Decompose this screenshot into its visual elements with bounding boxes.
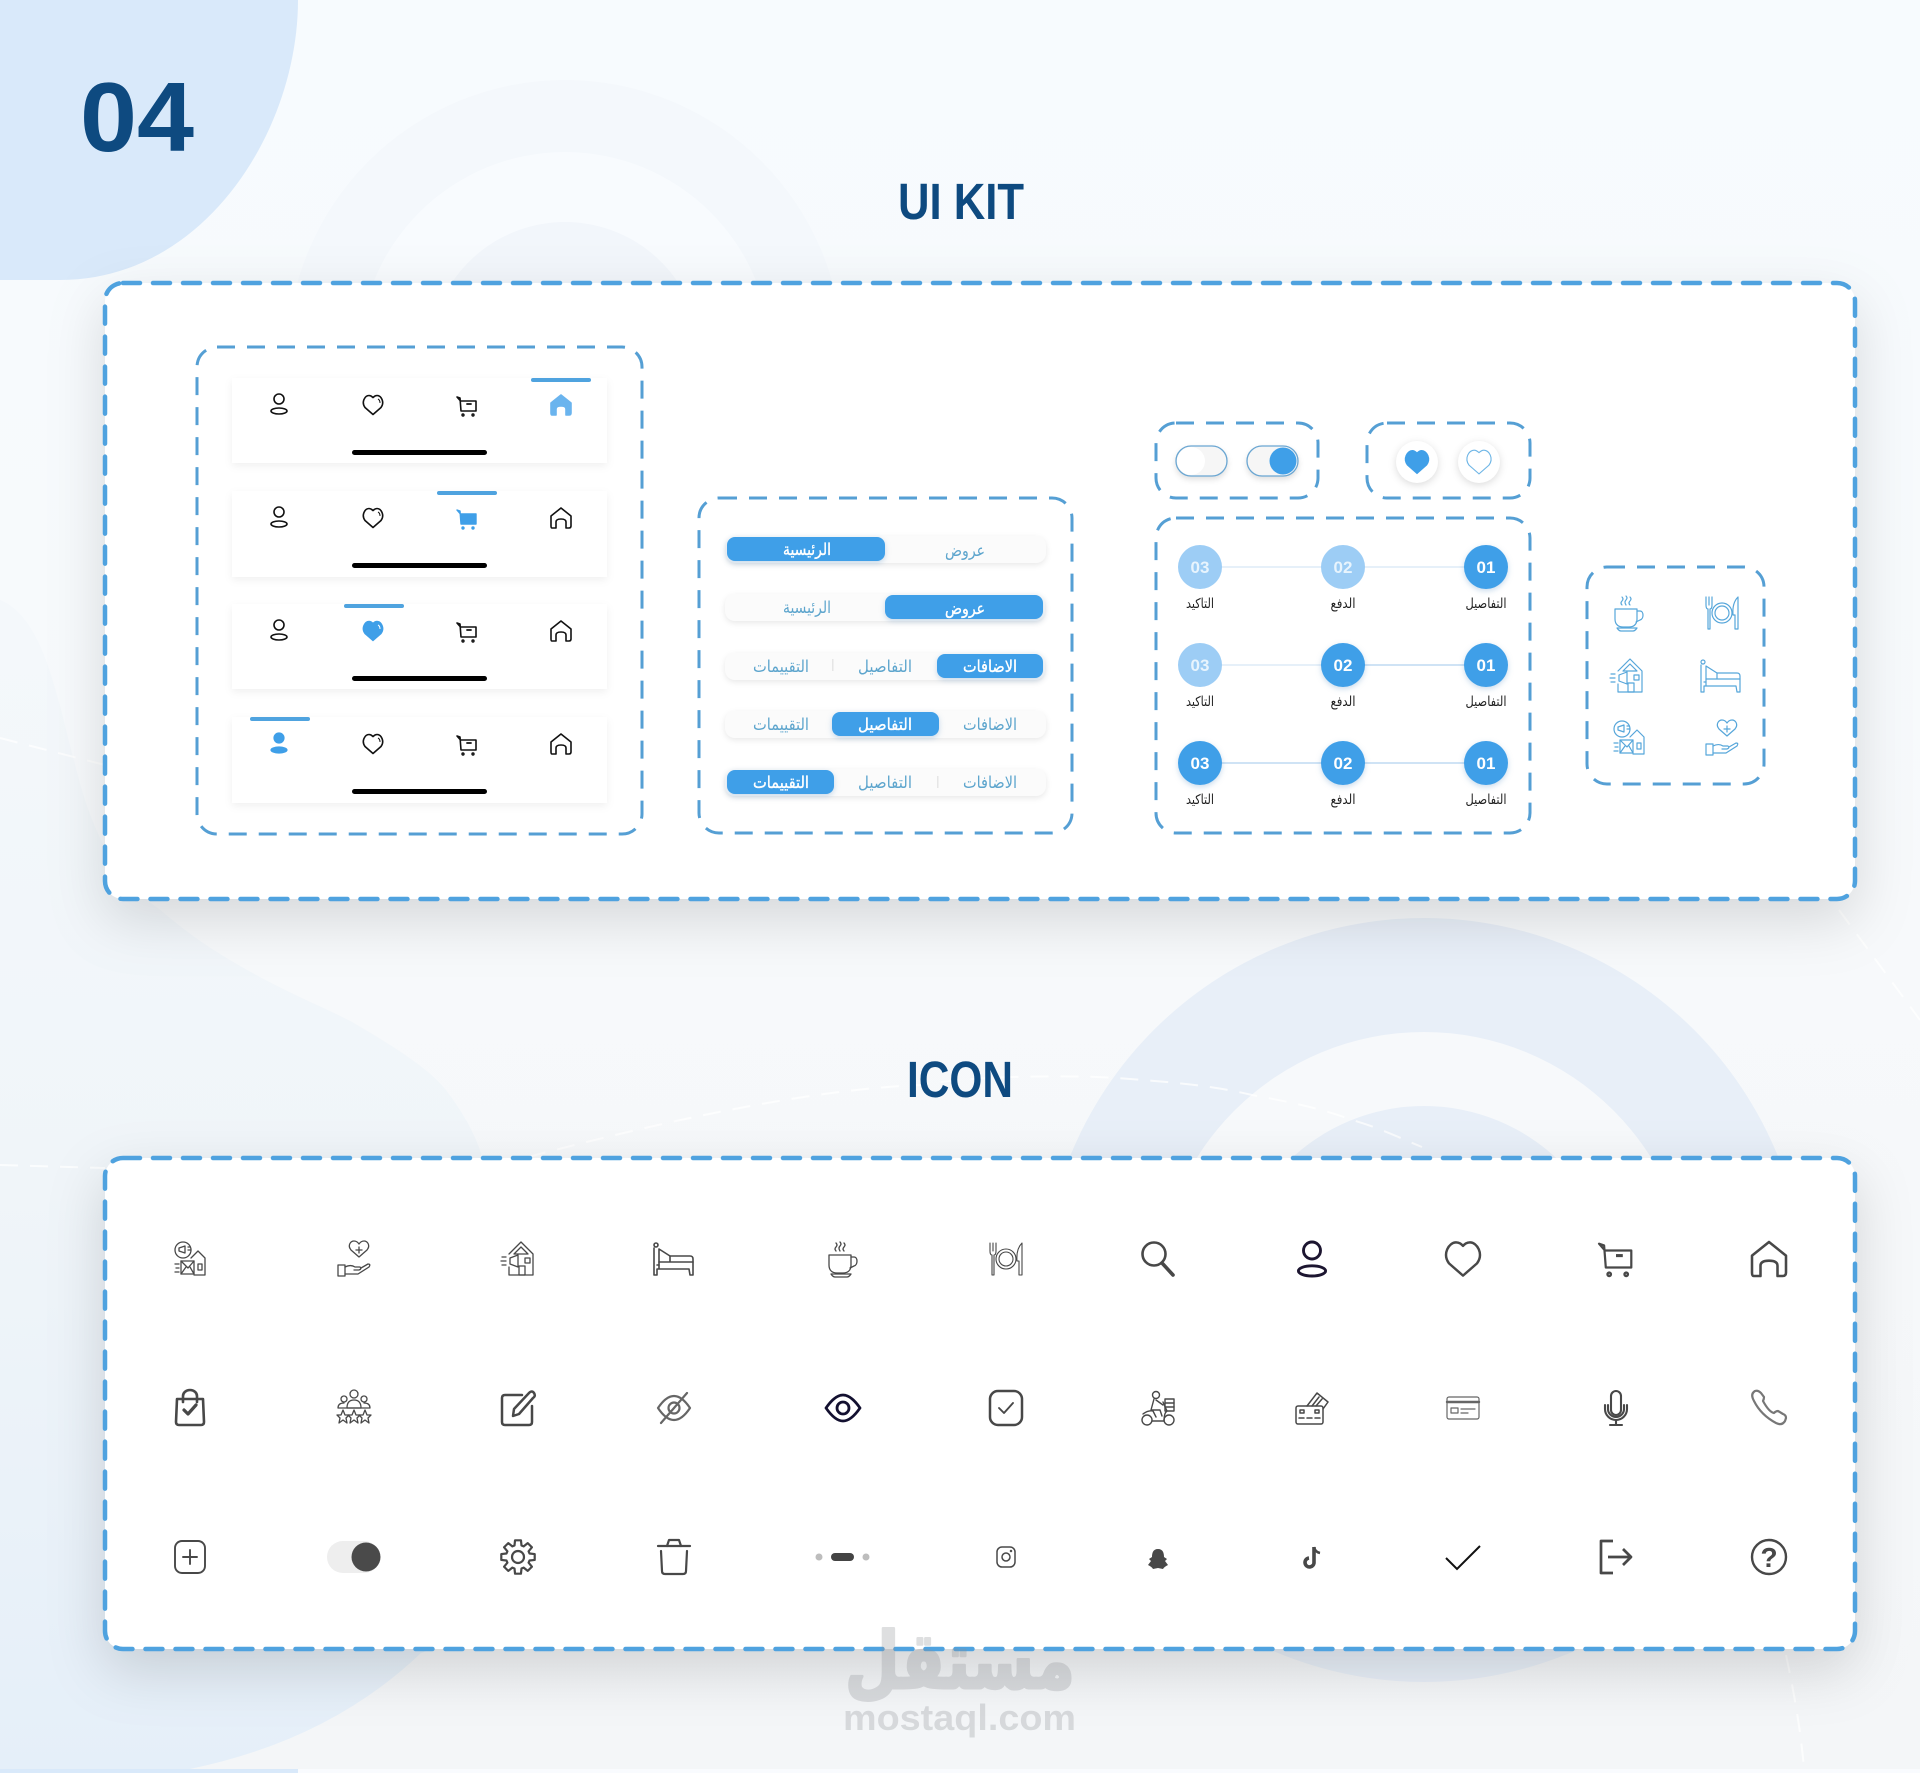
stepper 2: 02 — [1334, 656, 1352, 675]
panel: favourite buttons — [1367, 423, 1530, 498]
icon: plate — [990, 1243, 1022, 1275]
icon: pagination dots — [816, 1553, 870, 1561]
stepper 1 — [1178, 545, 1508, 612]
icon: add square — [175, 1541, 205, 1573]
icon: settings gear — [501, 1540, 535, 1574]
stepper 2: الدفع — [1330, 694, 1356, 710]
tabs row 1: عروض — [945, 541, 985, 561]
section number: 04 — [80, 62, 194, 172]
tabs row 3 — [725, 653, 1045, 680]
icon: coffee — [1615, 596, 1643, 631]
icon grid row 2 — [176, 1390, 1786, 1425]
stepper 2: 03 — [1191, 656, 1209, 675]
background: faint top arcs — [287, 80, 843, 636]
icon: tiktok — [1305, 1547, 1320, 1567]
icon: eye — [826, 1395, 860, 1421]
nav bar 3: heart active — [232, 604, 607, 689]
icon grid row 3 — [175, 1540, 1786, 1574]
icon: instagram — [997, 1547, 1015, 1567]
tabs row 5: التفاصيل — [858, 773, 912, 792]
corner blob — [0, 0, 298, 280]
icon: house megaphone — [501, 1242, 533, 1275]
heading: ICON: ICON — [907, 1051, 1013, 1108]
panel: UI kit — [105, 283, 1855, 899]
stepper 2: التفاصيل — [1466, 694, 1506, 710]
tabs row 4: الاضافات — [963, 715, 1017, 734]
stepper 2: 01 — [1477, 656, 1495, 675]
icon: help — [1752, 1540, 1786, 1574]
tabs row 4 — [725, 711, 1046, 738]
button: filled heart — [1396, 441, 1438, 483]
icon: help: ? — [1760, 1542, 1778, 1573]
stepper 3: 01 — [1477, 754, 1495, 773]
stepper 3: الدفع — [1330, 792, 1356, 808]
icon set frame — [1587, 567, 1764, 784]
icon: phone — [1752, 1391, 1786, 1424]
tabs row 1: الرئيسية — [783, 540, 831, 560]
nav frame — [197, 347, 642, 834]
panel: toggles — [1156, 423, 1318, 498]
icon: house — [1610, 659, 1642, 692]
tabs row 2: عروض — [945, 599, 985, 619]
favourites frame — [1367, 423, 1530, 498]
watermark: latin: mostaql.com — [843, 1697, 1076, 1738]
icon grid row 1 — [175, 1241, 1786, 1277]
background: bottom-left soft blob — [0, 600, 481, 1769]
icon: credit card — [1447, 1397, 1479, 1419]
icon: bed — [654, 1243, 693, 1275]
stepper 3: 03 — [1191, 754, 1209, 773]
background: white dashed curves — [0, 738, 1920, 1769]
icon: microphone — [1605, 1391, 1627, 1425]
stepper 3: 02 — [1334, 754, 1352, 773]
icon: toggle — [327, 1541, 380, 1573]
steppers frame — [1156, 518, 1530, 833]
icon: home — [1752, 1242, 1786, 1276]
icon: bed — [1701, 660, 1740, 692]
panel: icons — [105, 1158, 1855, 1649]
stepper 3: التفاصيل — [1466, 792, 1506, 808]
nav bar 1: home active — [232, 378, 607, 463]
stepper 2 — [1178, 643, 1508, 710]
panel frame — [105, 283, 1855, 899]
icon: shopping bag check — [176, 1390, 204, 1425]
tabs row 2 — [725, 594, 1045, 621]
tabs row 5 — [725, 769, 1046, 796]
button: outlined heart — [1458, 441, 1500, 483]
bottom edge strip — [0, 1769, 1920, 1773]
icon: eye off — [658, 1393, 690, 1423]
icon: user — [1298, 1242, 1326, 1276]
stepper 2: التاكيد — [1186, 694, 1214, 710]
background: concentric rings — [1042, 918, 1806, 1682]
tabs row 1 — [726, 536, 1046, 563]
panel: blue icon set — [1587, 567, 1764, 784]
icon: logout — [1601, 1541, 1631, 1573]
watermark: arabic: مستقل — [845, 1617, 1075, 1707]
icon: edit — [502, 1392, 535, 1425]
panel: bottom navigation bars — [197, 347, 642, 834]
icons frame — [105, 1158, 1855, 1649]
icon: search — [1142, 1242, 1173, 1275]
tabs row 4: التقييمات — [753, 715, 809, 734]
icon: mail house — [1614, 721, 1644, 754]
icon: check — [1446, 1546, 1480, 1569]
stepper 1: الدفع — [1330, 596, 1356, 612]
tabs row 3: الاضافات — [963, 657, 1017, 676]
stepper 3: التاكيد — [1186, 792, 1214, 808]
stepper 1: 01 — [1477, 558, 1495, 577]
icon: heart — [1446, 1242, 1480, 1276]
stepper 1: 02 — [1334, 558, 1352, 577]
icon: check square — [990, 1391, 1022, 1425]
toggle on — [1247, 446, 1298, 476]
stepper 1: التاكيد — [1186, 596, 1214, 612]
toggle off — [1176, 446, 1227, 476]
icon: coffee — [829, 1242, 857, 1277]
icon: trash — [658, 1540, 690, 1574]
stepper 1: التفاصيل — [1466, 596, 1506, 612]
tabs row 5: التقييمات — [753, 773, 809, 792]
panel: steppers — [1156, 518, 1530, 833]
panel: segmented tabs — [699, 498, 1072, 833]
tabs row 5: الاضافات — [963, 773, 1017, 792]
tabs row 4: التفاصيل — [858, 715, 912, 734]
icon: plate — [1706, 597, 1738, 629]
tabs row 3: التقييمات — [753, 657, 809, 676]
nav bar 2: cart active — [232, 491, 607, 577]
icon: delivery scooter — [1142, 1392, 1174, 1425]
heading: UI KIT: UI KIT — [898, 173, 1024, 230]
nav bar 4: profile active — [232, 717, 607, 803]
tabs frame — [699, 498, 1072, 833]
icon: cart — [1599, 1244, 1631, 1276]
tabs row 2: الرئيسية — [783, 598, 831, 618]
watermark — [843, 1617, 1076, 1738]
icon: payment cards — [1296, 1393, 1328, 1424]
icon: snapchat — [1148, 1549, 1168, 1569]
tabs row 3: التفاصيل — [858, 657, 912, 676]
stepper 1: 03 — [1191, 558, 1209, 577]
stepper 3 — [1178, 741, 1508, 808]
icon: heart in hand — [338, 1241, 370, 1276]
icon: people rating — [337, 1390, 371, 1423]
icon: mail house — [175, 1242, 205, 1275]
toggles frame — [1156, 423, 1318, 498]
icon: heart in hand — [1706, 720, 1738, 755]
